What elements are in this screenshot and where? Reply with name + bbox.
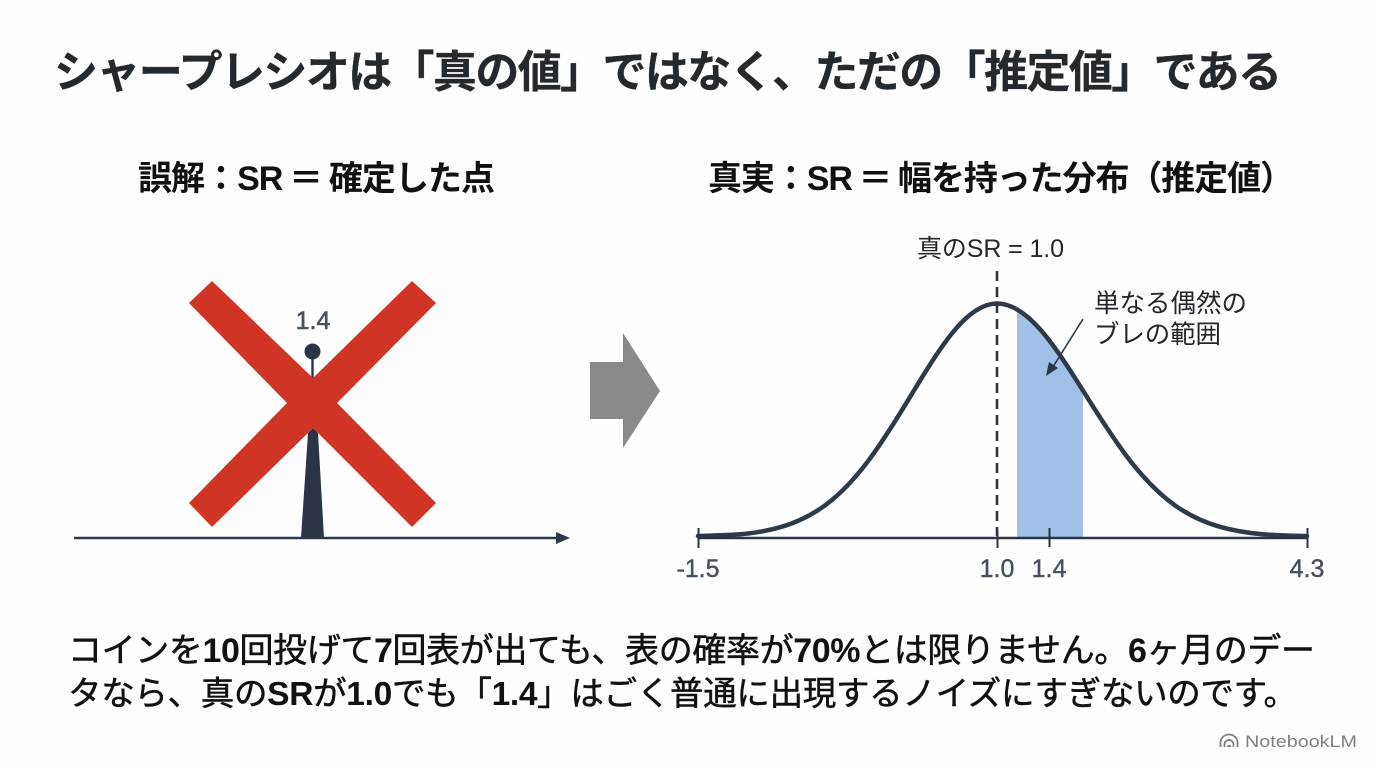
watermark: NotebookLM: NotebookLM	[1245, 732, 1357, 751]
panel: misconception point chart	[74, 281, 570, 544]
shaded range	[1017, 309, 1083, 537]
axis arrow	[74, 532, 570, 544]
x axis	[698, 537, 1307, 539]
red cross	[189, 281, 436, 527]
axis labels: 1.4	[1032, 555, 1066, 583]
axis end ticks and value ticks	[698, 528, 1308, 548]
icon: NotebookLM arcs	[1220, 734, 1238, 747]
point label: 1.4	[296, 307, 330, 335]
axis labels: 1.0	[980, 555, 1014, 583]
heading: truth: 真実：SR ＝ 幅を持った分布（推定値）	[708, 151, 1294, 200]
panel: distribution chart	[676, 235, 1324, 583]
annotation: ブレの範囲	[1094, 314, 1221, 351]
title: シャープレシオは「真の値」ではなく、ただの「推定値」である	[54, 36, 1282, 100]
body text: タなら、真のSRが1.0でも「1.4」はごく普通に出現するノイズにすぎないのです。	[68, 666, 1297, 715]
spike	[301, 428, 324, 538]
annotation: 単なる偶然の	[1094, 283, 1247, 320]
axis labels: -1.5	[676, 555, 720, 583]
heading: misconception: 誤解：SR ＝ 確定した点	[138, 151, 495, 200]
arrow	[590, 333, 660, 448]
point marker	[304, 344, 320, 380]
axis labels: 4.3	[1290, 555, 1324, 583]
body text	[68, 623, 1315, 715]
axis labels	[676, 555, 1324, 583]
true value label: 真のSR = 1.0	[917, 235, 1064, 263]
true value dashed line	[996, 271, 998, 536]
bell curve	[698, 304, 1307, 536]
annotation arrow	[1046, 319, 1083, 376]
body text: コインを10回投げて7回表が出ても、表の確率が70%とは限りません。6ヶ月のデー	[68, 623, 1315, 672]
annotation	[1094, 283, 1247, 351]
